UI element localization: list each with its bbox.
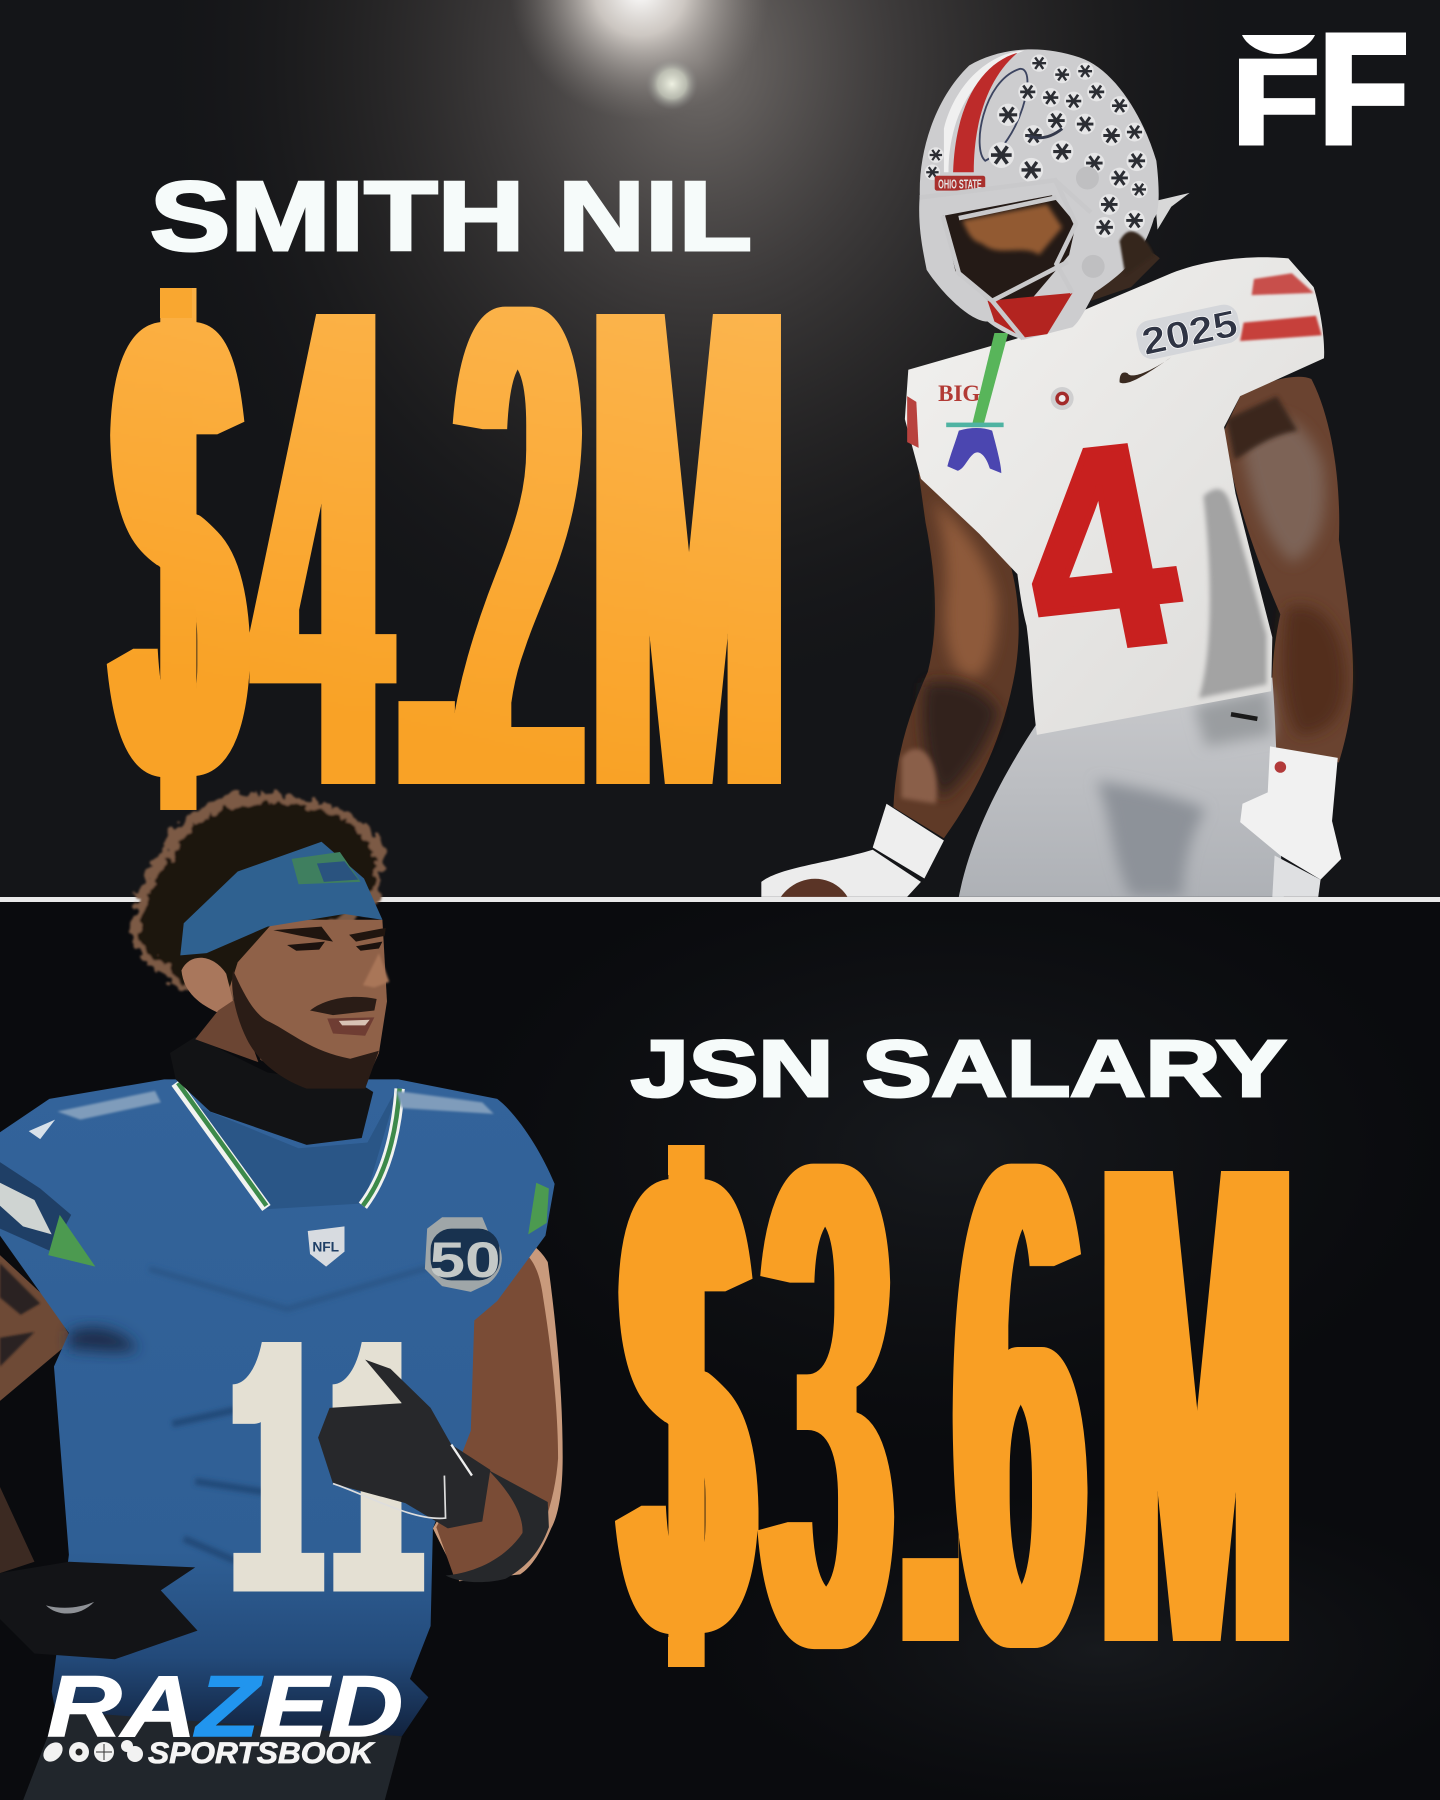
background: top panel — [0, 0, 1440, 899]
gloves — [0, 1360, 490, 1659]
jersey badge: 50 — [425, 1217, 502, 1292]
right arm — [433, 1236, 563, 1582]
logo: Razed Sportsbook: RA ZED — [47, 1659, 403, 1755]
helmet — [919, 49, 1190, 340]
big number: $3.6M: $3.6M — [622, 1002, 1293, 1800]
icon: nike swoosh — [1120, 357, 1171, 383]
left arm with tattoos — [0, 1255, 72, 1573]
jersey badge: NFL — [308, 1226, 344, 1267]
logo: Razed Sportsbook: SPORTSBOOK — [148, 1737, 375, 1770]
sleeve logo: seahawk — [0, 1120, 549, 1267]
neck gaiter — [170, 1037, 373, 1145]
jersey number 4: 4 — [994, 384, 1203, 714]
icons: sports balls — [40, 1739, 143, 1765]
big number: $4.2M — [106, 288, 781, 810]
right arm — [1224, 377, 1353, 762]
jersey badge: NFL: NFL — [312, 1240, 339, 1255]
helmet: OHIO STATE — [938, 177, 982, 191]
jersey number 11: 11 — [233, 1277, 420, 1707]
jersey badge: 2025: 2025 — [1138, 303, 1241, 364]
jersey — [0, 1079, 555, 1736]
heading: SMITH NIL: SMITH NIL — [150, 161, 752, 271]
jersey badge: 50: 50 — [429, 1231, 501, 1288]
jersey badge: BIG: BIG — [938, 381, 980, 406]
player 2: Seahawks receiver — [0, 793, 563, 1800]
jersey badge: Ohio State — [1051, 387, 1074, 410]
heading: JSN SALARY: JSN SALARY — [631, 1024, 1286, 1113]
head — [130, 793, 389, 1089]
background: bottom panel — [0, 850, 1440, 1800]
right glove — [1240, 746, 1341, 897]
pants — [959, 677, 1284, 897]
logo: FF: F — [1318, 2, 1409, 177]
pants and lower body — [23, 1711, 402, 1800]
big number: $4.2M: $4.2M — [114, 145, 784, 948]
player 1: Ohio State receiver — [761, 49, 1353, 897]
divider line — [0, 897, 1440, 902]
big number: $3.6M — [614, 1145, 1290, 1667]
left wristband and hand with ball — [761, 804, 944, 897]
logo: FF — [1231, 2, 1409, 177]
mouthguard — [946, 333, 1008, 473]
jersey — [905, 257, 1324, 735]
left arm — [893, 473, 1019, 838]
logo: FF: F — [1231, 34, 1320, 170]
